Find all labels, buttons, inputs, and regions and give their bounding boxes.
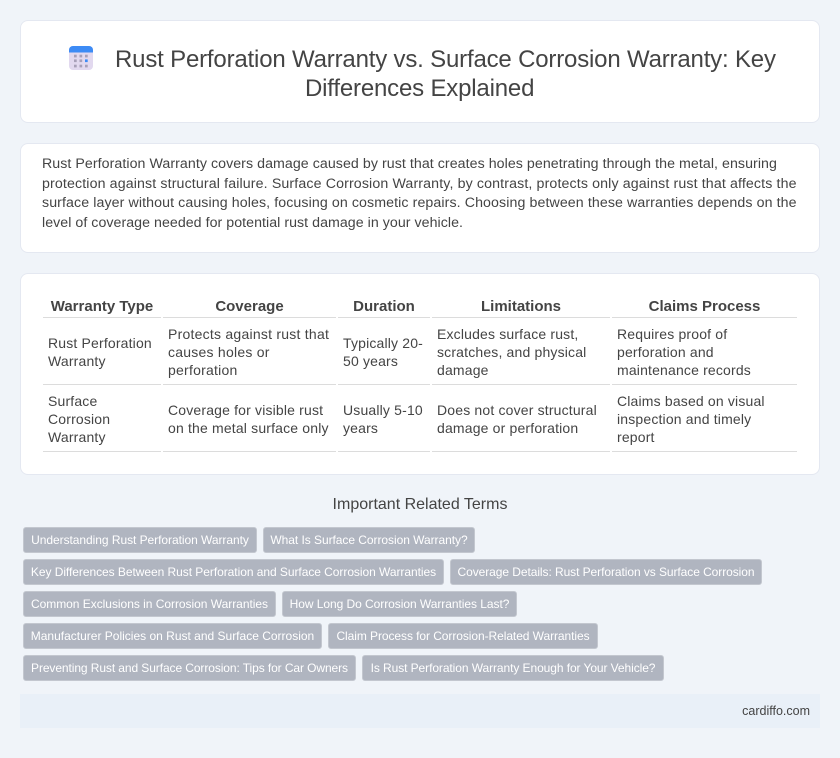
tag <box>23 655 356 681</box>
title: Differences Explained <box>305 75 534 102</box>
row 2: claims process <box>617 393 765 445</box>
row 1: limitations: scratches, and physical <box>437 344 586 360</box>
header: coverage: Coverage <box>215 298 284 315</box>
row 2: coverage <box>168 402 329 436</box>
row 2: warranty type: Surface <box>48 393 97 409</box>
summary text <box>42 156 797 230</box>
header: duration: Duration <box>353 298 415 315</box>
summary text: Rust Perforation Warranty covers damage caused by rust that creates holes penetrating through the metal, ensuring <box>42 156 777 172</box>
row 2: duration: years <box>343 420 378 436</box>
tag <box>362 655 664 681</box>
row 2: limitations <box>437 402 597 436</box>
row 2: limitations: Does not cover structural <box>437 402 597 418</box>
title <box>115 46 776 102</box>
row 1: duration: 50 years <box>343 353 398 369</box>
tag <box>328 623 598 649</box>
row 1: warranty type: Warranty <box>48 353 106 369</box>
tag: What Is Surface Corrosion Warranty? <box>270 533 468 547</box>
row 2: claims process: inspection and timely <box>617 411 751 427</box>
row 1: claims process: maintenance records <box>617 362 751 378</box>
related terms tags <box>23 527 762 681</box>
tag <box>23 623 322 649</box>
footer bar <box>20 694 820 728</box>
tag <box>282 591 517 617</box>
row 2: claims process: Claims based on visual <box>617 393 765 409</box>
row 1: duration <box>343 335 423 369</box>
row 1: claims process: Requires proof of <box>617 326 727 342</box>
header: limitations: Limitations <box>481 298 561 315</box>
icon: calendar <box>69 46 93 70</box>
row 1: limitations <box>437 326 586 378</box>
row 2: duration: Usually 5-10 <box>343 402 423 418</box>
tag: Common Exclusions in Corrosion Warranties <box>31 597 268 611</box>
tag: Key Differences Between Rust Perforation and Surface Corrosion Warranties <box>31 565 436 579</box>
summary text: protection against structural failure. Surface Corrosion Warranty, by contrast, protects only against rust that affects the <box>42 176 797 192</box>
header: warranty type: Warranty Type <box>51 298 153 315</box>
tag <box>23 527 257 553</box>
comparison table <box>43 298 797 452</box>
tag <box>23 559 444 585</box>
footer source text: cardiffo.com <box>742 704 810 718</box>
tag <box>263 527 475 553</box>
tag: Preventing Rust and Surface Corrosion: Tips for Car Owners <box>31 661 348 675</box>
row 1: duration: Typically 20- <box>343 335 423 351</box>
row 1: limitations: Excludes surface rust, <box>437 326 578 342</box>
row 1: warranty type <box>48 335 152 369</box>
row 1: coverage <box>168 326 329 378</box>
related terms heading: Important Related Terms <box>333 496 507 513</box>
header: claims process: Claims Process <box>649 298 760 315</box>
tag: Coverage Details: Rust Perforation vs Surface Corrosion <box>458 565 754 579</box>
row 2: warranty type: Corrosion <box>48 411 110 427</box>
row 1: coverage: causes holes or <box>168 344 270 360</box>
summary text: surface layer without causing holes, focusing on cosmetic repairs. Choosing between these warranties depends on the <box>42 195 797 211</box>
row 2: coverage: on the metal surface only <box>168 420 329 436</box>
row 1: claims process <box>617 326 751 378</box>
row 1: coverage: Protects against rust that <box>168 326 329 342</box>
tag: Is Rust Perforation Warranty Enough for Your Vehicle? <box>371 661 655 675</box>
row 2: warranty type: Warranty <box>48 429 106 445</box>
summary text: level of coverage needed for potential rust damage in your vehicle. <box>42 214 463 230</box>
summary panel <box>20 143 820 253</box>
row 1: claims process: perforation and <box>617 344 714 360</box>
row 2: coverage: Coverage for visible rust <box>168 402 323 418</box>
tag: Claim Process for Corrosion-Related Warranties <box>336 629 590 643</box>
tag <box>450 559 762 585</box>
title: Rust Perforation Warranty vs. Surface Corrosion Warranty: Key <box>115 46 776 73</box>
row 2: duration <box>343 402 423 436</box>
row 1: limitations: damage <box>437 362 489 378</box>
table panel <box>20 273 820 475</box>
row 1: warranty type: Rust Perforation <box>48 335 152 351</box>
row 2: claims process: report <box>617 429 655 445</box>
tag <box>23 591 276 617</box>
row 2: warranty type <box>48 393 110 445</box>
header panel <box>20 20 820 123</box>
row 1: coverage: perforation <box>168 362 238 378</box>
tag: How Long Do Corrosion Warranties Last? <box>290 597 509 611</box>
row 2: limitations: damage or perforation <box>437 420 578 436</box>
tag: Manufacturer Policies on Rust and Surface Corrosion <box>31 629 314 643</box>
tag: Understanding Rust Perforation Warranty <box>31 533 249 547</box>
